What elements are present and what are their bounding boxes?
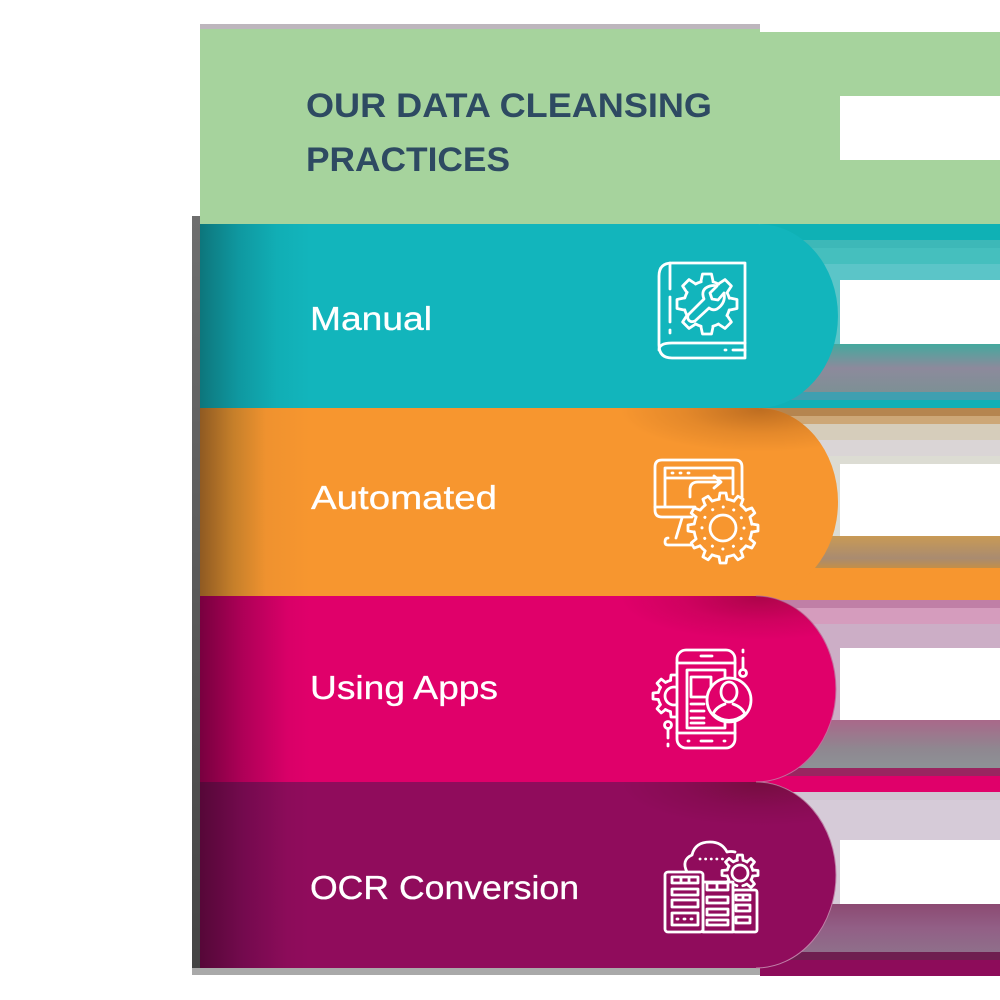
bottom edge shadow (192, 968, 762, 975)
title: PRACTICES (306, 141, 510, 179)
icon: phone with user and gear (653, 650, 751, 748)
icon: cloud servers with gear (665, 842, 758, 932)
left edge shadow (192, 216, 200, 975)
panel: using apps (200, 596, 836, 782)
panel: automated (200, 408, 838, 596)
right side colour bands (760, 32, 1000, 976)
icon: manual book with gear and wrench (659, 263, 745, 358)
label: automated: Automated (311, 479, 497, 516)
label: ocr conversion: OCR Conversion (310, 869, 579, 906)
title (306, 87, 712, 179)
panel: ocr conversion (200, 782, 836, 968)
title: OUR DATA CLEANSING (306, 87, 712, 125)
label: manual: Manual (310, 300, 432, 337)
panel: manual (200, 224, 838, 408)
icon: monitor with gear (655, 460, 758, 563)
label: using apps: Using Apps (310, 669, 498, 706)
panel: heading (200, 24, 760, 224)
